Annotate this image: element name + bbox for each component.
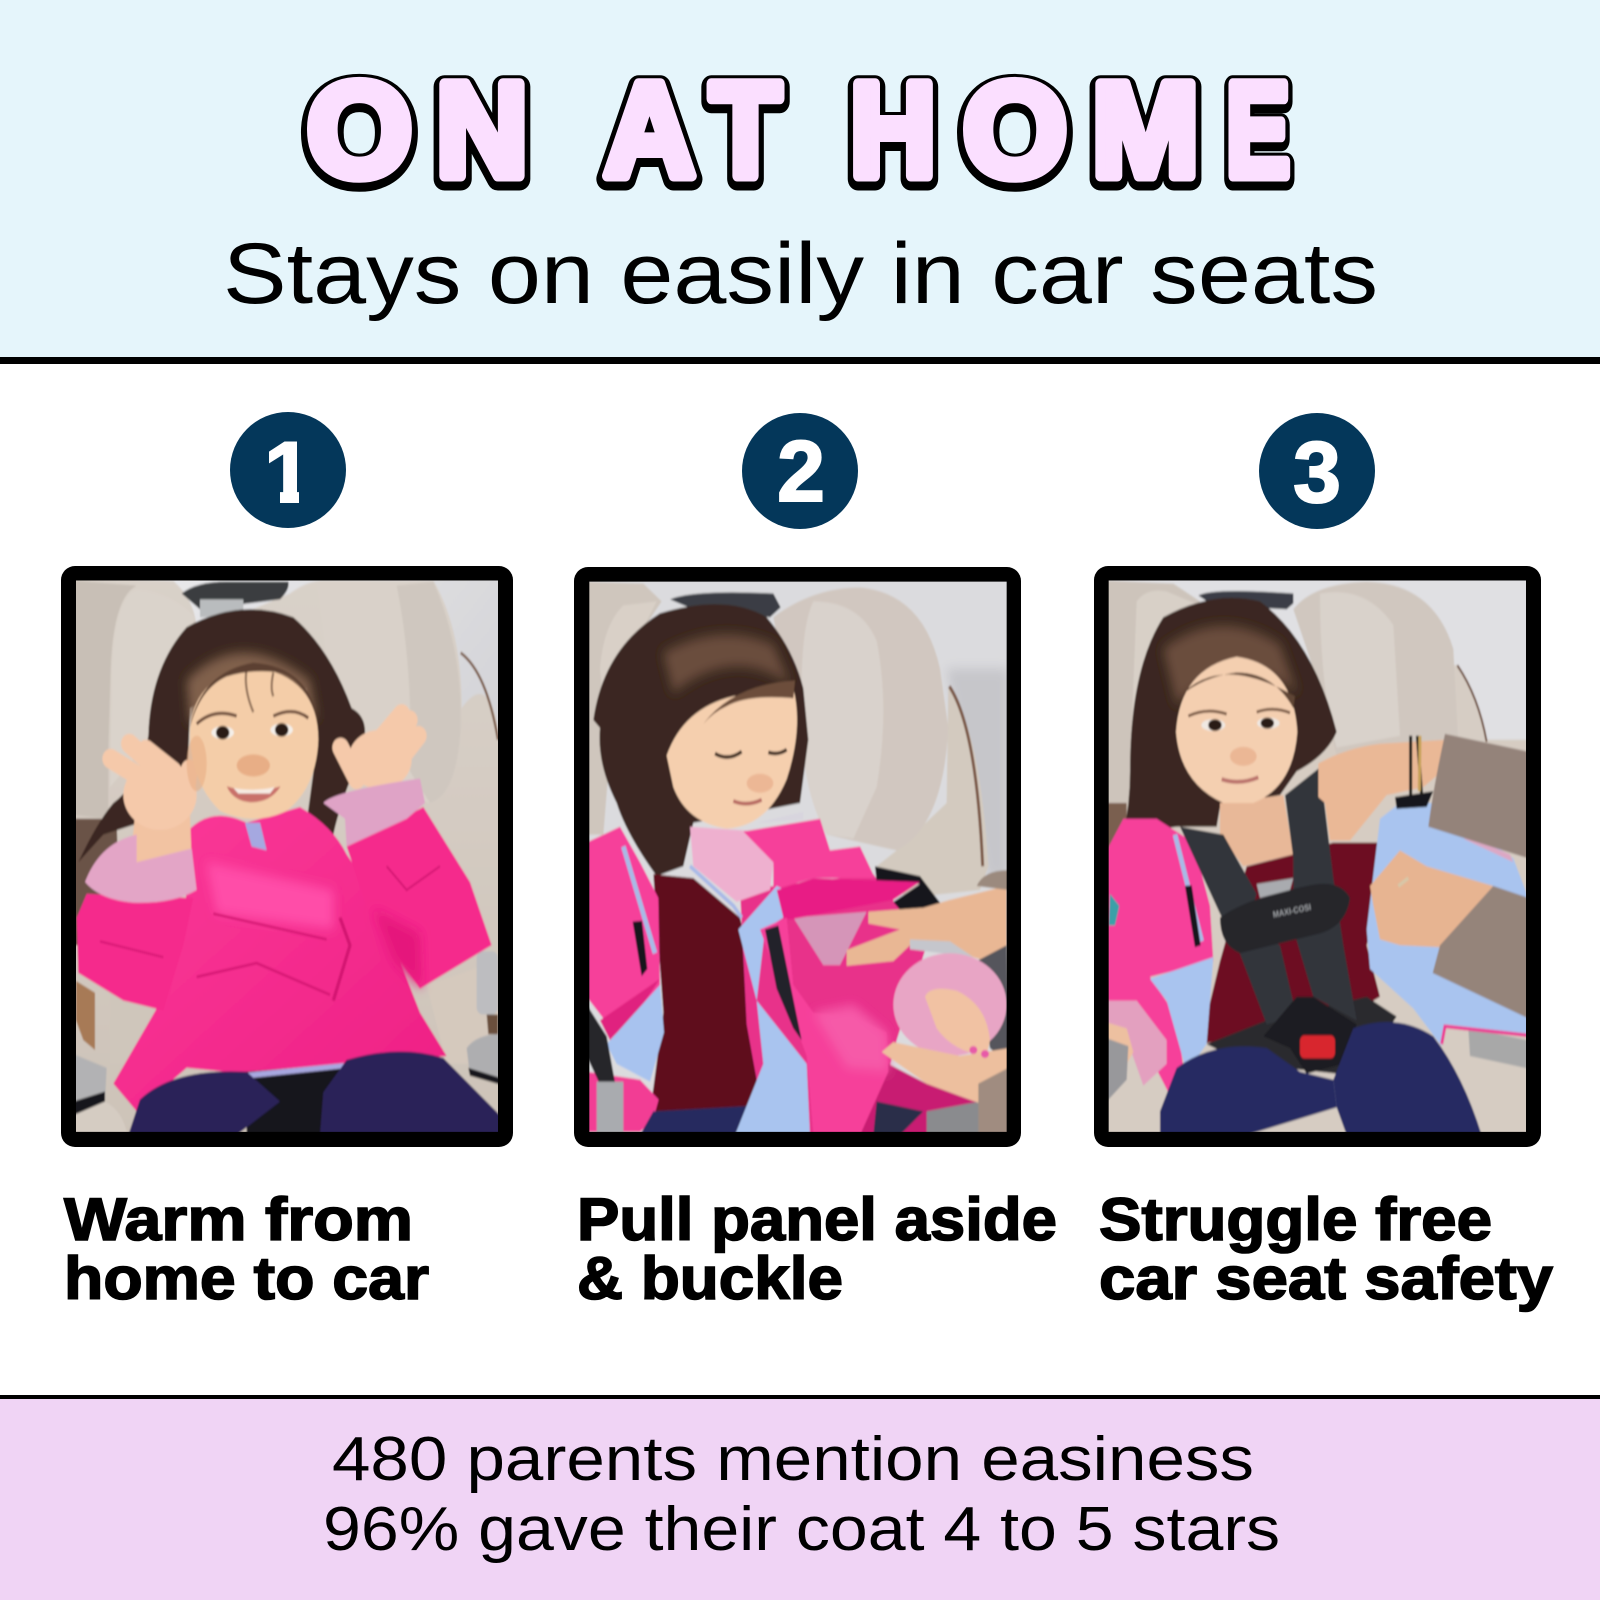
footer panel bbox=[0, 1398, 1600, 1600]
arms bbox=[77, 894, 193, 1011]
jeans bbox=[246, 1067, 341, 1132]
face bbox=[667, 688, 797, 829]
adult hand bottom bbox=[882, 1042, 1008, 1103]
title: E bbox=[1226, 59, 1290, 208]
footer statistics: 480 parents mention easiness bbox=[332, 1425, 1254, 1494]
lower sleeve bbox=[1433, 886, 1528, 1018]
neck bbox=[1220, 795, 1293, 866]
title: A bbox=[604, 56, 695, 205]
jacket left bbox=[1107, 819, 1213, 1096]
title: O bbox=[963, 56, 1067, 205]
front panel bbox=[760, 918, 888, 1135]
caption 1 bbox=[64, 1186, 429, 1312]
straps bbox=[1180, 827, 1297, 1024]
title: M bbox=[1092, 56, 1199, 205]
title: N bbox=[436, 59, 528, 208]
seam bbox=[690, 866, 742, 918]
title: N bbox=[436, 56, 528, 205]
footer statistics: 96% gave their coat 4 to 5 stars bbox=[323, 1495, 1280, 1564]
caption 3 bbox=[1099, 1186, 1554, 1312]
caption 3: Struggle free bbox=[1099, 1186, 1492, 1253]
title: O bbox=[307, 59, 412, 208]
step badge 2 bbox=[742, 413, 858, 529]
title: H bbox=[850, 56, 936, 205]
title: M bbox=[1092, 59, 1199, 208]
title: T bbox=[710, 59, 781, 208]
photo frame 2: pulling coat panel aside bbox=[574, 567, 1021, 1147]
header panel bbox=[0, 0, 1600, 358]
step badge 3 bbox=[1259, 413, 1375, 529]
subtitle: Stays on easily in car seats bbox=[223, 226, 1378, 322]
hair bbox=[1123, 598, 1337, 835]
knit collar bbox=[690, 827, 773, 902]
strap bbox=[874, 865, 940, 911]
step badge 1 bbox=[230, 412, 346, 528]
caption 3: car seat safety bbox=[1099, 1245, 1554, 1312]
caption 2: & buckle bbox=[577, 1245, 843, 1312]
title bbox=[307, 56, 1290, 208]
jacket body bbox=[113, 807, 447, 1111]
blue panel bbox=[735, 886, 810, 1135]
jeans bbox=[1160, 1046, 1337, 1135]
collar bbox=[743, 819, 875, 890]
photo frame 3: buckled harness bbox=[1094, 566, 1541, 1147]
caption 2 bbox=[577, 1186, 1057, 1312]
title: E bbox=[1226, 56, 1290, 205]
adult hand top bbox=[847, 886, 1007, 966]
step badge 2: 2 bbox=[777, 424, 825, 520]
title: T bbox=[710, 56, 781, 205]
left jacket bbox=[589, 826, 661, 1020]
crotch buckle bbox=[1263, 997, 1357, 1074]
cuffs bbox=[85, 835, 197, 903]
hair bbox=[78, 609, 365, 866]
photo frame 1: child waving in pink coat bbox=[61, 566, 513, 1147]
fleece right bbox=[1367, 803, 1528, 1046]
hair bbox=[593, 604, 808, 876]
face bbox=[190, 667, 318, 819]
chest clip bbox=[1220, 884, 1350, 953]
belt shadow bbox=[1207, 997, 1397, 1076]
step badge 1: 1 bbox=[264, 425, 312, 521]
title: H bbox=[850, 59, 936, 208]
caption 1: Warm from bbox=[64, 1186, 413, 1253]
shirt bbox=[1206, 841, 1380, 1044]
flap bbox=[777, 878, 920, 920]
upper sleeve bbox=[1428, 734, 1528, 858]
caption 1: home to car bbox=[64, 1245, 429, 1312]
coat underlayer bbox=[740, 874, 927, 1135]
cup bbox=[1468, 1028, 1528, 1069]
cuff and hand bbox=[1107, 1001, 1167, 1086]
upper hand bbox=[1318, 740, 1447, 841]
step badge 3: 3 bbox=[1293, 425, 1341, 521]
photo frame 3: buckled harness: MAXI-COSI bbox=[1272, 902, 1312, 920]
lower hand bbox=[1370, 850, 1493, 947]
title: O bbox=[307, 56, 412, 205]
skin bbox=[132, 816, 192, 862]
title: A bbox=[604, 59, 695, 208]
shirt bbox=[652, 872, 758, 1114]
title: O bbox=[963, 59, 1067, 208]
caption 2: Pull panel aside bbox=[577, 1186, 1057, 1253]
cuff with child hand bbox=[893, 953, 1007, 1056]
face bbox=[1176, 657, 1297, 803]
footer statistics bbox=[323, 1425, 1280, 1564]
knit inside bbox=[793, 912, 867, 965]
